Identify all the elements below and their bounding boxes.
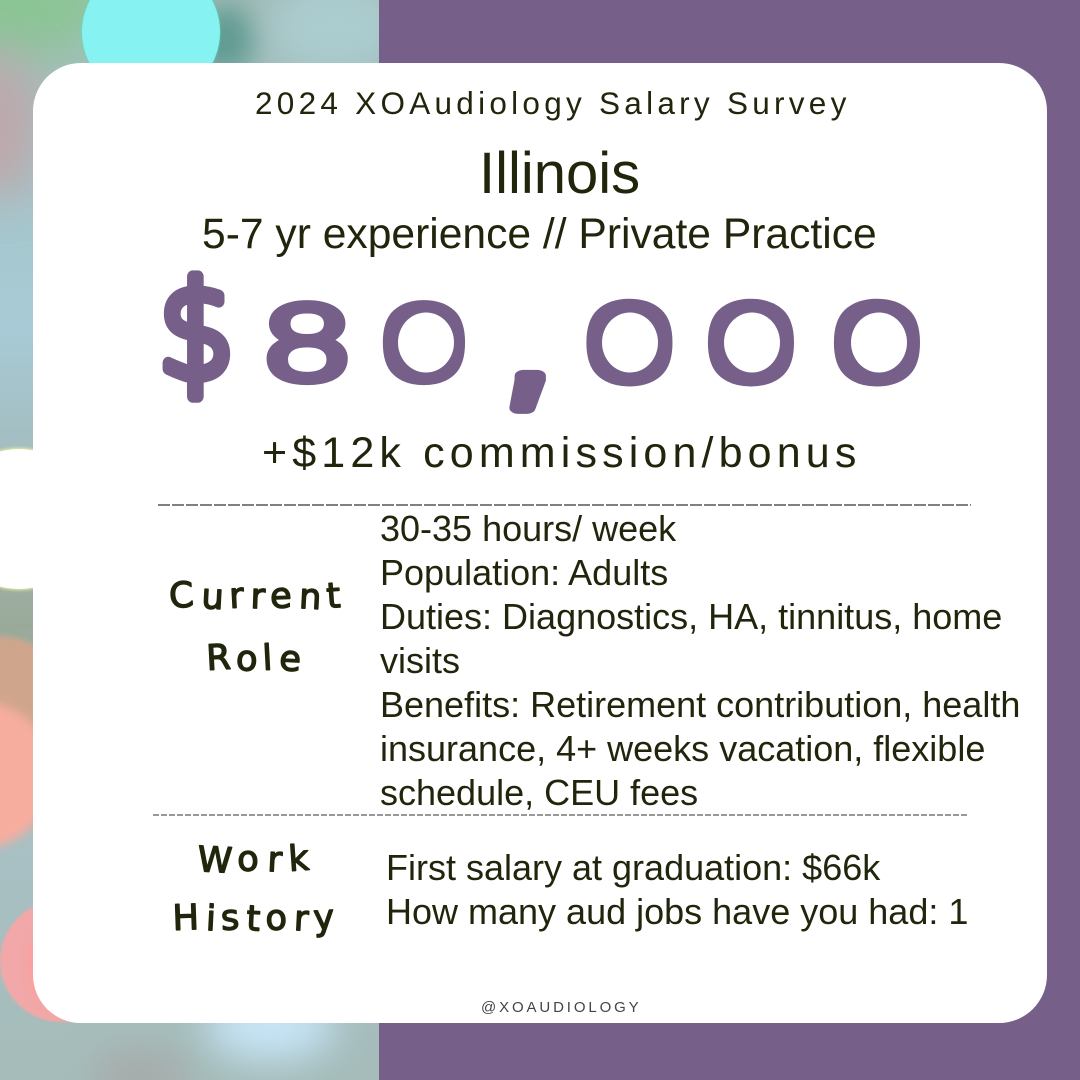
experience and practice setting: 5-7 yr experience // Private Practice (202, 210, 877, 258)
work history details (386, 847, 968, 932)
current role details: Population: Adults (380, 552, 668, 593)
salary figure: $ (158, 254, 234, 409)
label: work history: History (172, 898, 341, 940)
label: current role: Role (205, 638, 308, 680)
state heading: Illinois (479, 141, 640, 206)
salary figure: , (488, 221, 573, 430)
survey title: 2024 XOAudiology Salary Survey (255, 85, 851, 121)
salary figure: 000 (582, 287, 925, 403)
divider (158, 504, 971, 506)
current role details: Duties: Diagnostics, HA, tinnitus, home (380, 596, 1002, 637)
label: current role: Current (168, 575, 348, 618)
salary figure: 80 (260, 287, 472, 403)
current role details: visits (380, 640, 460, 681)
footer handle: @XOAUDIOLOGY (481, 999, 642, 1016)
current role details: schedule, CEU fees (380, 772, 698, 813)
label: work history: Work (197, 838, 318, 882)
current role details (380, 508, 1020, 813)
current role details: 30-35 hours/ week (380, 508, 676, 549)
background photo: bokeh lights (0, 0, 379, 1080)
work history details: First salary at graduation: $66k (386, 847, 880, 888)
commission and bonus: +$12k commission/bonus (262, 429, 861, 477)
work history details: How many aud jobs have you had: 1 (386, 891, 968, 932)
divider (153, 814, 967, 816)
current role details: Benefits: Retirement contribution, health (380, 684, 1020, 725)
current role details: insurance, 4+ weeks vacation, flexible (380, 728, 985, 769)
